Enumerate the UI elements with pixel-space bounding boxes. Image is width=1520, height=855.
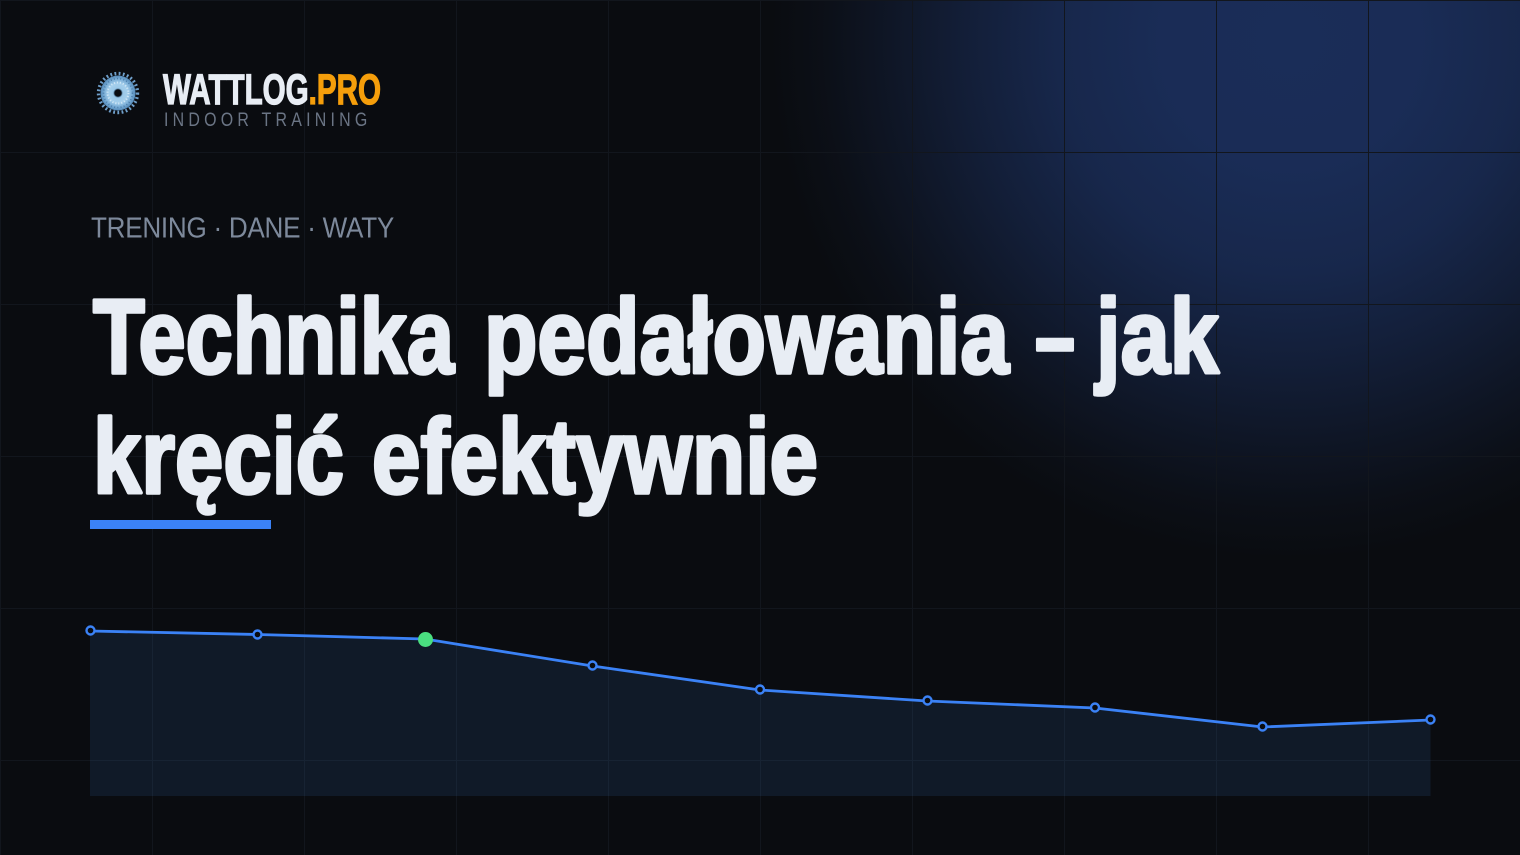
title bbox=[93, 278, 1220, 516]
highlighted point bbox=[418, 632, 433, 647]
title: efektywnie bbox=[372, 398, 818, 516]
title: kręcić bbox=[93, 398, 344, 516]
logo bbox=[98, 66, 381, 130]
title: Technika bbox=[93, 278, 455, 396]
line chart bbox=[86, 626, 1434, 796]
title underline bbox=[90, 520, 271, 529]
chart area bbox=[90, 631, 1430, 796]
brand name: WATTLOG.PRO bbox=[163, 66, 381, 114]
title: pedałowania bbox=[484, 278, 1010, 396]
data points bbox=[86, 626, 1434, 730]
title: – bbox=[1035, 278, 1075, 396]
eyebrow: TRENING · DANE · WATY bbox=[91, 211, 394, 244]
icon: cassette cog bbox=[98, 74, 138, 112]
brand tagline: INDOOR TRAINING bbox=[164, 109, 367, 130]
title: jak bbox=[1094, 278, 1220, 396]
chart line bbox=[90, 631, 1430, 727]
